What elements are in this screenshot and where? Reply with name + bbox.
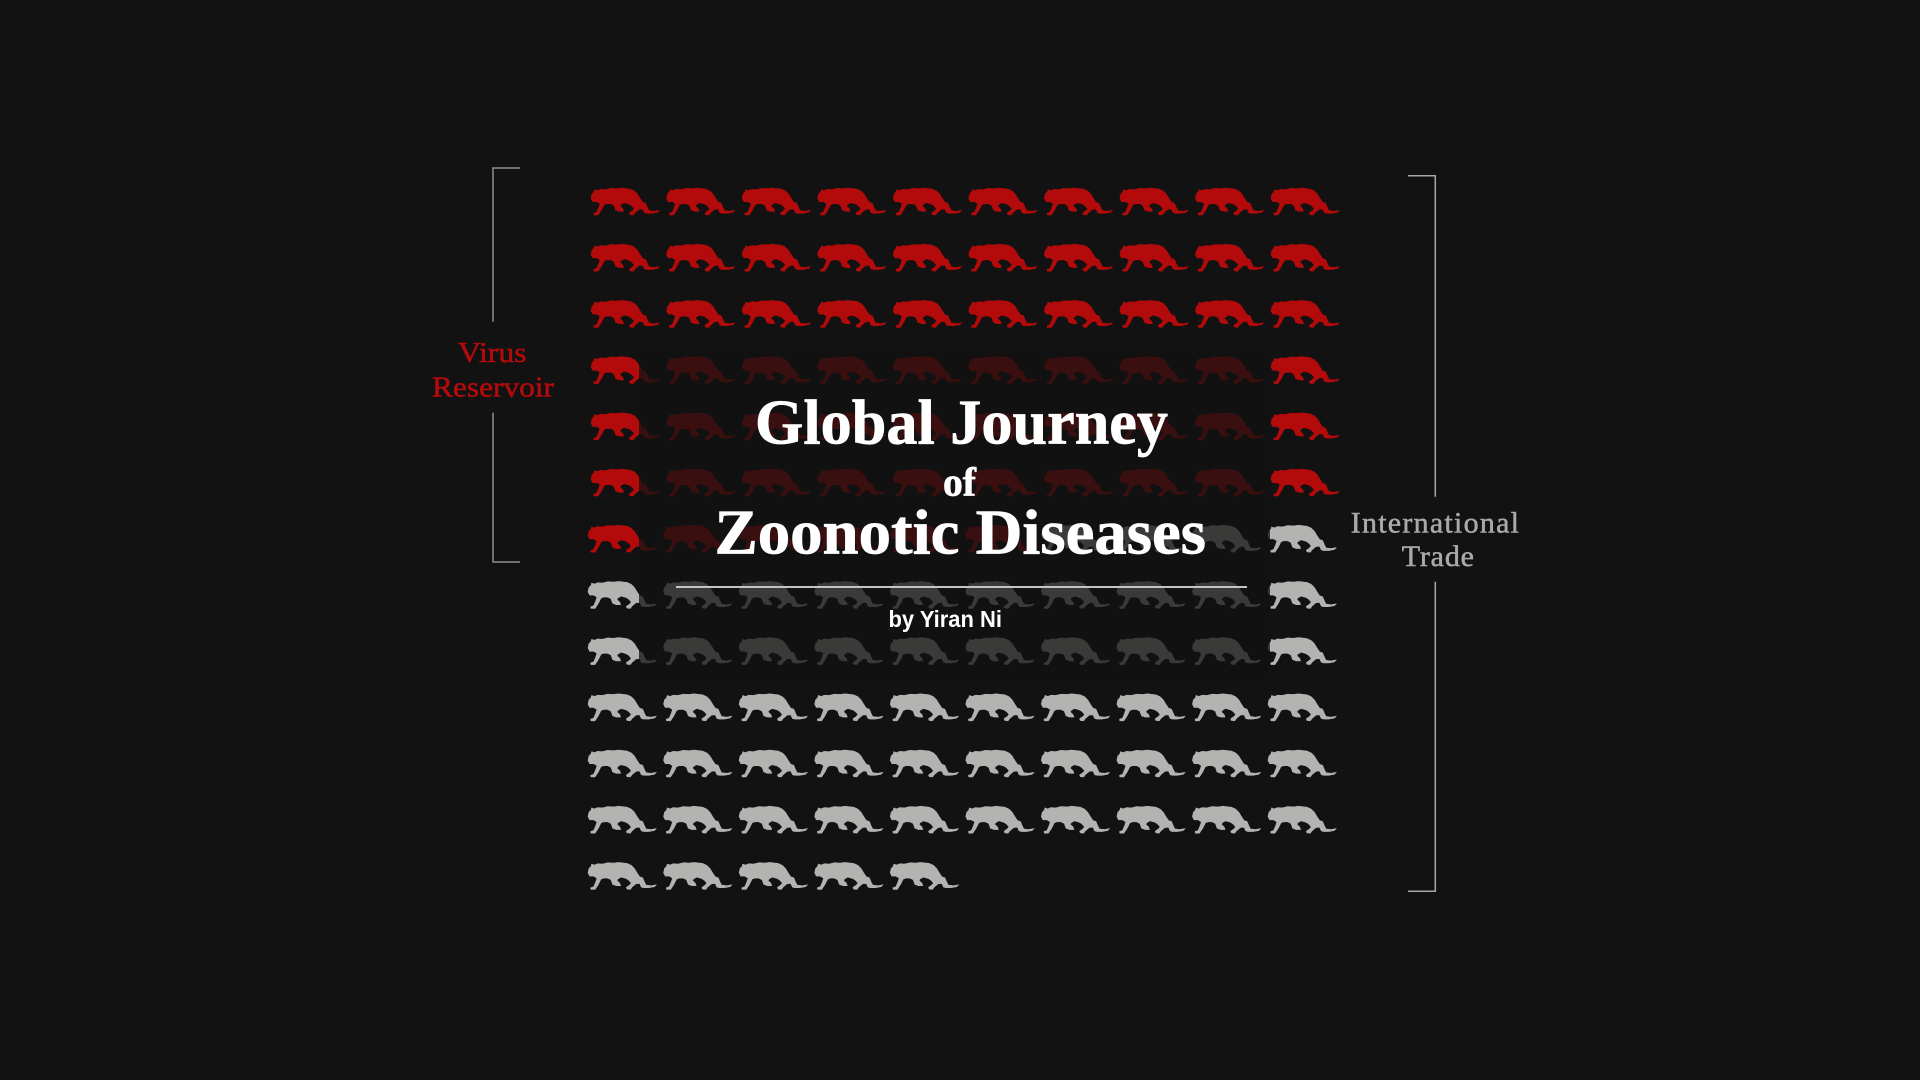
pictogram: gray animals, international trade [588, 525, 1336, 889]
label: international trade [1351, 507, 1519, 573]
byline: by Yiran Ni [888, 606, 1002, 632]
dimming panel behind title [639, 345, 1270, 680]
bracket: virus reservoir [493, 168, 520, 562]
label: international trade: International [1351, 507, 1519, 540]
pictogram: red animals, virus reservoir [588, 188, 1339, 552]
label: virus reservoir: Virus [458, 337, 526, 369]
label: international trade: Trade [1402, 540, 1474, 573]
title divider [676, 586, 1247, 588]
bracket: international trade [1408, 176, 1435, 891]
title: Global Journey [755, 386, 1168, 458]
title [714, 386, 1206, 568]
title: Zoonotic Diseases [714, 496, 1206, 568]
label: virus reservoir [432, 337, 554, 404]
title: of [943, 460, 977, 504]
label: virus reservoir: Reservoir [432, 372, 554, 404]
